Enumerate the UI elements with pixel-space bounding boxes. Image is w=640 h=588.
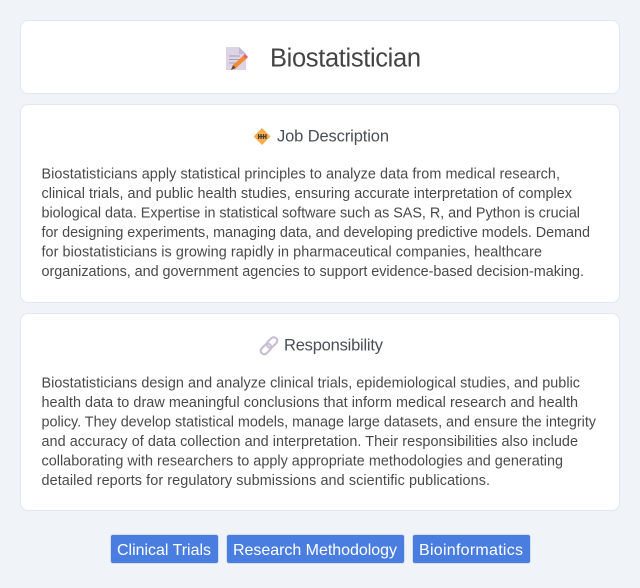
text block: job description: biological data. Expertise in statistical software such as SAS, R, and Python is crucial (42, 206, 580, 222)
icon: chain link (259, 336, 279, 356)
text block: responsibility: policy. They develop statistical models, manage large datasets, and ensure the integrity (42, 414, 597, 430)
panel: responsibility (20, 313, 620, 511)
text block: responsibility: health data to draw meaningful conclusions that inform medical research and health (42, 395, 578, 411)
text block: responsibility: collaborating with researchers to apply appropriate methodologies and generating (42, 454, 563, 470)
text block: job description: Biostatisticians apply statistical principles to analyze data from medical research, (42, 166, 560, 182)
tag: bioinformatics (412, 534, 531, 564)
title: Biostatistician (270, 44, 421, 72)
text block: responsibility: Biostatisticians design and analyze clinical trials, epidemiological studies, and public (42, 376, 580, 392)
panel: title card (20, 20, 620, 94)
panel: job description (20, 104, 620, 303)
heading: responsibility: Responsibility (284, 336, 384, 354)
text block: job description: for designing experiments, managing data, and developing predictive models. Demand (42, 225, 590, 241)
icon: document with pencil (226, 47, 248, 70)
heading: job description: Job Description (277, 128, 389, 146)
text block: responsibility: detailed reports for regulatory submissions and scientific publications. (42, 473, 490, 489)
tag: clinical trials: Clinical Trials (117, 542, 211, 559)
text block: responsibility: and accuracy of data collection and interpretation. Their responsibilities also include (42, 434, 578, 450)
text block: job description: for biostatisticians is growing rapidly in pharmaceutical companies, healthcare (42, 244, 542, 260)
text block: job description: organizations, and government agencies to support evidence-based decision-making. (42, 264, 584, 280)
icon: orange diamond sign (254, 128, 270, 145)
text block: job description: clinical trials, and public health studies, ensuring accurate interpretation of complex (42, 186, 573, 202)
tag: bioinformatics: Bioinformatics (419, 542, 523, 559)
tag: clinical trials (110, 534, 219, 564)
text block: job description (42, 166, 590, 280)
tag: research methodology (226, 534, 405, 564)
tag: research methodology: Research Methodology (233, 542, 397, 559)
text block: responsibility (42, 376, 597, 489)
